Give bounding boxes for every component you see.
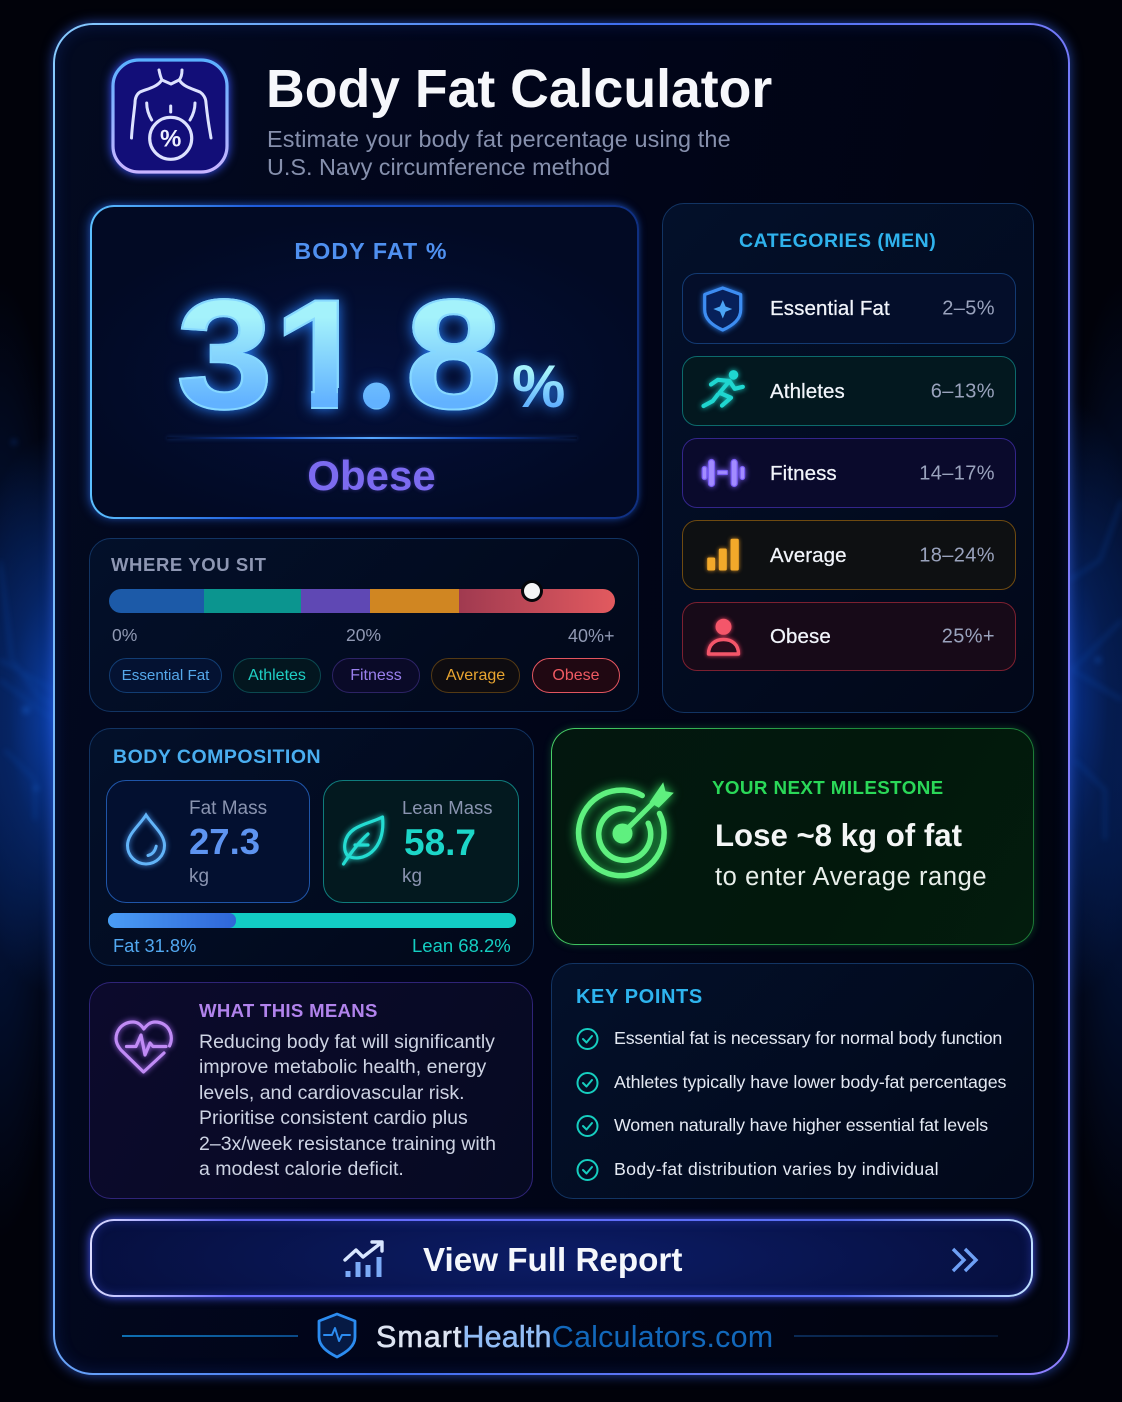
- composition bar: [108, 913, 516, 928]
- big value: %: [512, 353, 565, 420]
- card: fat mass: 27.3: [189, 821, 260, 862]
- key point 3: Women naturally have higher essential fat levels: [614, 1115, 988, 1135]
- body text: Reducing body fat will significantly: [199, 1031, 495, 1053]
- title: Body Fat Calculator: [266, 59, 772, 119]
- subtitle: U.S. Navy circumference method: [267, 154, 610, 180]
- text: Athletes: [248, 667, 306, 684]
- body text: 2–3x/week resistance training with: [199, 1133, 496, 1155]
- panel: body composition: [89, 728, 534, 966]
- glow divider: [167, 437, 577, 438]
- site name: SmartHealthCalculators.com: [376, 1320, 773, 1354]
- big value: 8: [405, 268, 502, 442]
- panel: next milestone: [551, 728, 1034, 945]
- key point 4: Body-fat distribution varies by individual: [614, 1159, 939, 1179]
- category: athletes: Athletes: [770, 380, 845, 403]
- milestone label: YOUR NEXT MILESTONE: [712, 777, 944, 798]
- heading: WHERE YOU SIT: [111, 554, 266, 575]
- body text: levels, and cardiovascular risk.: [199, 1082, 465, 1104]
- icon: leaf: [338, 812, 389, 869]
- category: fitness: Fitness: [770, 462, 837, 485]
- key point 2: Athletes typically have lower body-fat percentages: [614, 1072, 1006, 1092]
- big value: 1: [273, 268, 370, 442]
- category: average: [682, 520, 1016, 590]
- category: athletes: [682, 356, 1016, 426]
- icon: target: [568, 778, 678, 886]
- panel: where you sit: [89, 538, 639, 712]
- fat mass text: Fat Mass: [189, 798, 267, 819]
- big value: .: [349, 229, 405, 452]
- big value: 3: [176, 268, 273, 442]
- legend pills: Essential Fat: [122, 667, 209, 684]
- icon: chart: [343, 1240, 384, 1277]
- panel: key points: [551, 963, 1034, 1199]
- body text: Prioritise consistent cardio plus: [199, 1107, 468, 1129]
- heading: WHAT THIS MEANS: [199, 1000, 378, 1021]
- composition heading: BODY COMPOSITION: [113, 746, 321, 768]
- category: essential fat: [682, 273, 1016, 344]
- category: Obese: [307, 452, 436, 499]
- body text: [199, 1031, 496, 1180]
- card: lean mass: [323, 780, 519, 903]
- body text: a modest calorie deficit.: [199, 1158, 404, 1180]
- category: obese: Obese: [770, 625, 831, 648]
- key points heading: KEY POINTS: [576, 986, 703, 1008]
- text: Fitness: [350, 667, 402, 684]
- legend pills: [109, 658, 222, 693]
- label: BODY FAT %: [294, 238, 448, 264]
- card: lean mass: kg: [402, 866, 422, 887]
- icon: heart pulse: [110, 1016, 178, 1077]
- milestone subtext: to enter Average range: [715, 863, 987, 891]
- button label: View Full Report: [423, 1242, 682, 1279]
- category: essential fat: 2–5%: [942, 298, 995, 320]
- panel: what this means: [89, 982, 533, 1199]
- category: obese: 25%+: [942, 626, 995, 648]
- category: average: 18–24%: [919, 544, 995, 566]
- icon: chevrons: [952, 1248, 978, 1272]
- footer: [122, 1312, 998, 1358]
- card: fat mass: kg: [189, 866, 209, 887]
- app icon: body with percent: %: [160, 126, 181, 152]
- categories heading: CATEGORIES (MEN): [739, 230, 936, 252]
- lean mass text: Lean Mass: [402, 797, 492, 818]
- icon: shield pulse: [318, 1312, 356, 1358]
- panel: body fat result: [90, 205, 639, 519]
- text: Average: [446, 667, 505, 684]
- text: Obese: [552, 667, 600, 684]
- category: essential fat: Essential Fat: [770, 297, 890, 320]
- marker: [521, 580, 543, 602]
- bar labels: Fat 31.8%: [113, 935, 196, 956]
- card: lean mass: 58.7: [404, 822, 476, 863]
- app icon: body with percent: [103, 50, 237, 182]
- text: 20%: [346, 625, 381, 645]
- range bar: [109, 589, 615, 613]
- text: 40%+: [568, 626, 615, 646]
- big value: [170, 268, 574, 442]
- button: view full report: [90, 1219, 1033, 1297]
- category: athletes: 6–13%: [931, 380, 995, 402]
- key point 1: Essential fat is necessary for normal body function: [614, 1028, 1002, 1048]
- text: Lean 68.2%: [412, 935, 511, 956]
- milestone headline: Lose ~8 kg of fat: [715, 818, 962, 853]
- icon: water drop: [122, 810, 170, 870]
- scale labels: 0%: [112, 625, 137, 645]
- category: fitness: [682, 438, 1016, 508]
- card: fat mass: [106, 780, 310, 903]
- category: average: Average: [770, 544, 847, 567]
- body text: improve metabolic health, energy: [199, 1056, 486, 1078]
- subtitle: [267, 126, 731, 180]
- category: fitness: 14–17%: [919, 462, 995, 484]
- subtitle: Estimate your body fat percentage using the: [267, 126, 731, 152]
- panel: categories: [662, 203, 1034, 713]
- category: obese: [682, 602, 1016, 671]
